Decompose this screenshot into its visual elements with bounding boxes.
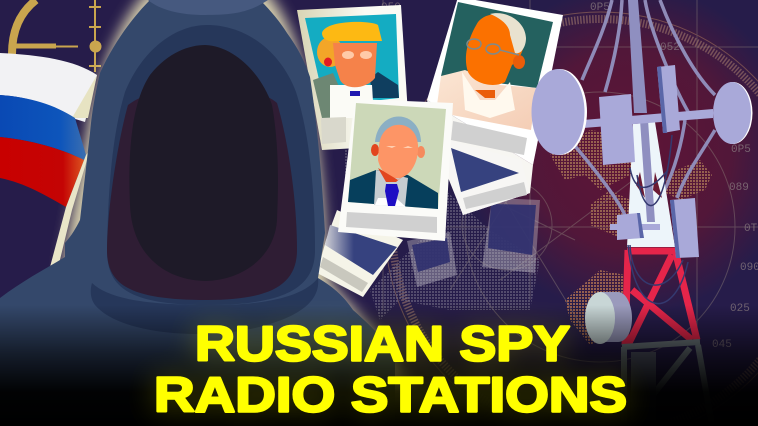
tower: white mast section — [627, 122, 675, 247]
dial numbers: 0P5 — [590, 2, 610, 14]
dial numbers: 052 — [660, 42, 680, 54]
dial numbers: 045 — [712, 339, 732, 351]
hood collar — [91, 278, 318, 334]
title — [154, 318, 627, 422]
gold clock emblem — [12, 0, 102, 72]
dial numbers: 025 — [730, 303, 750, 315]
dial numbers — [381, 2, 758, 351]
title glow — [153, 316, 628, 423]
dotted world map — [345, 130, 712, 345]
title: RADIO STATIONS — [154, 368, 627, 422]
tower cables — [575, 0, 715, 215]
tower: left dish — [532, 69, 587, 155]
photo: man in suit — [338, 99, 453, 241]
dial numbers: 089 — [729, 182, 749, 194]
tower: blue wires — [628, 135, 688, 304]
dial numbers: 0T — [744, 223, 758, 235]
tower: mast — [628, 0, 655, 222]
dial numbers: 050 — [381, 2, 401, 14]
tower: right dish — [713, 82, 752, 144]
title glow: RUSSIAN SPY — [194, 316, 571, 372]
hood body — [0, 0, 395, 426]
tower: drum dish — [585, 292, 632, 344]
tower: crossbar — [583, 109, 713, 128]
photo: old man in white coat — [427, 0, 563, 215]
russian flag — [0, 53, 97, 268]
hood top shade — [148, 0, 268, 15]
hood inner rim — [107, 25, 315, 305]
faded photos — [407, 198, 540, 287]
photo: blonde man — [297, 5, 410, 150]
title: RUSSIAN SPY — [195, 318, 570, 372]
title glow: RADIO STATIONS — [153, 367, 628, 423]
tower: panels — [599, 65, 699, 258]
radar grid and dials — [383, 0, 758, 426]
hood glow — [50, 0, 420, 400]
photo: navy card left — [317, 210, 403, 297]
dial tick ring — [392, 19, 758, 426]
bottom fade — [0, 305, 758, 426]
tower: lower grey lattice — [622, 342, 712, 426]
hooded figure — [0, 0, 395, 426]
photo: navy card right — [448, 140, 530, 215]
hood opening — [107, 86, 297, 300]
dial numbers: 0P5 — [731, 144, 751, 156]
tower: red lattice — [625, 250, 697, 345]
face void — [129, 45, 278, 281]
